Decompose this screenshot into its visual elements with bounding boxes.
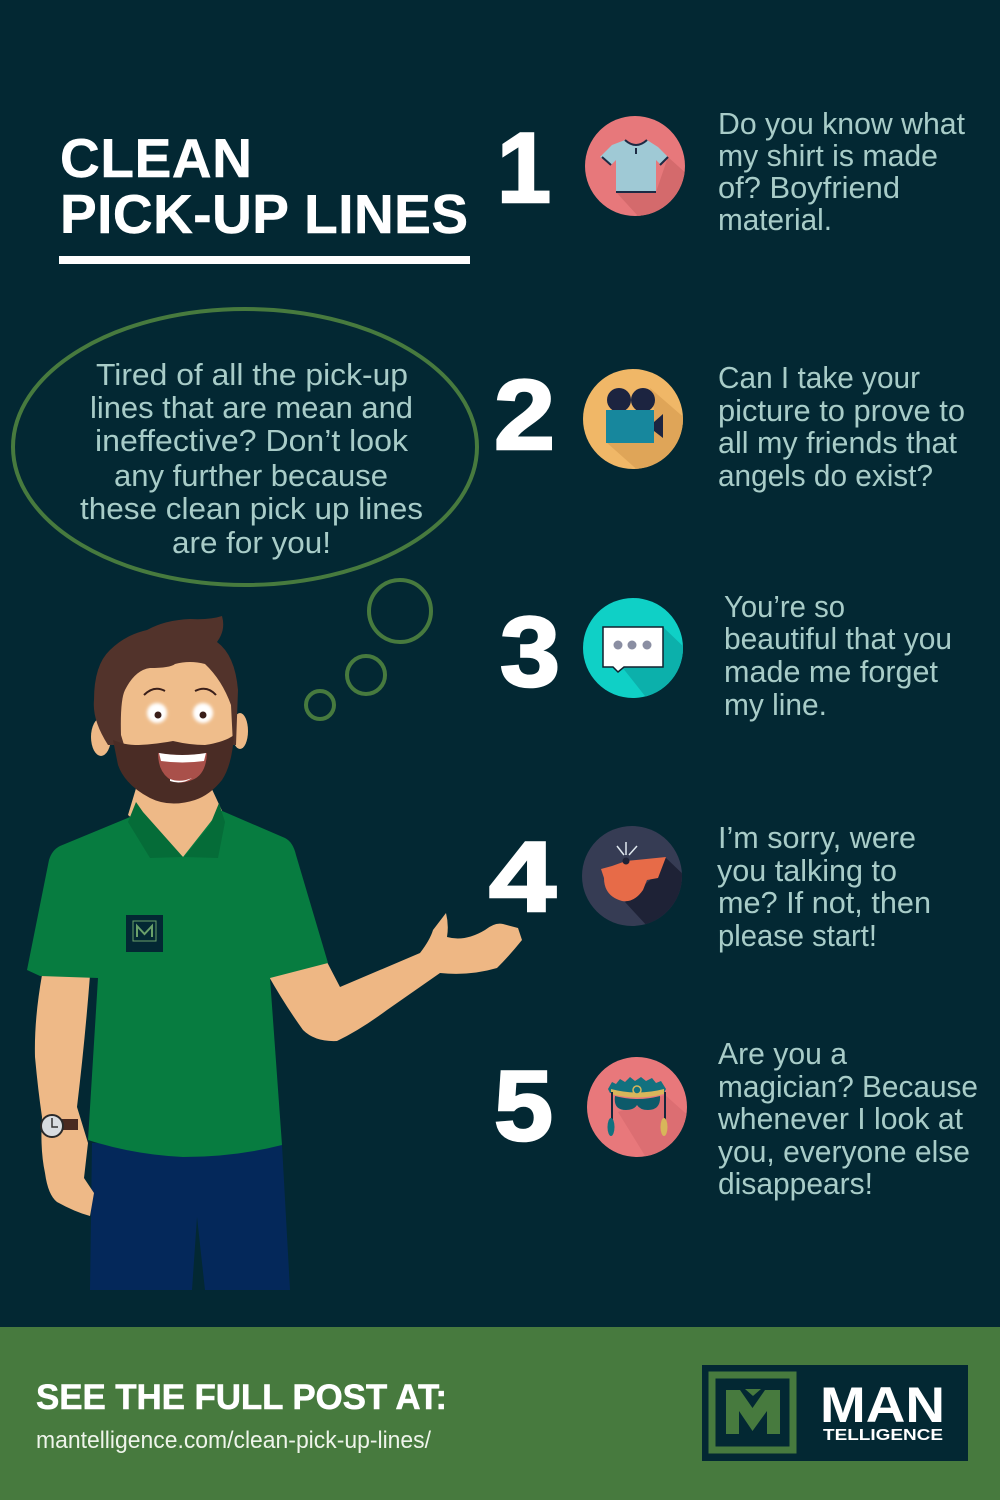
man: trousers [90,1143,290,1290]
title [59,127,470,264]
man: shirt logo badge [126,915,163,952]
icon: speech bubble [583,598,683,698]
icon: whistle [582,826,682,926]
text: line 3: You’re so [724,589,845,624]
text: line 3: made me forget [724,654,938,689]
man: neck [128,785,224,860]
logo: Mantelligence: MAN [820,1377,945,1433]
footer band [0,1327,1000,1500]
text: line 3: beautiful that you [724,621,952,656]
man: hair [94,616,238,745]
thought bubble with intro text: ineffective? Don’t look [95,423,409,458]
thought bubble with intro text: Tired of all the pick-up [96,357,408,392]
number 5: 5 [494,1050,553,1161]
thought bubble with intro text: these clean pick up lines [80,491,423,526]
man: ears [91,713,248,756]
text: line 2 [718,360,965,493]
text: line 4: you talking to [717,853,897,888]
title: PICK-UP LINES [60,183,468,245]
man: eyes [144,689,216,723]
text: line 5: you, everyone else [718,1134,970,1169]
text: line 1: of? Boyfriend [718,170,900,205]
title: CLEAN [60,127,252,189]
icon: shirt [585,116,685,216]
thought bubble with intro text: are for you! [172,525,331,560]
text: line 2: angels do exist? [718,458,933,493]
text: line 5 [717,1036,978,1201]
man: open mouth [158,753,207,783]
illustration: smiling bearded man in green polo [27,616,522,1290]
text: line 1: material. [718,202,832,237]
logo: Mantelligence [702,1365,968,1461]
text: line 4 [717,820,931,953]
text: line 3 [724,589,952,722]
man: face [121,662,233,748]
footer call to action: SEE THE FULL POST AT: [36,1378,447,1417]
text: line 5: disappears! [718,1166,873,1201]
text: line 1: Do you know what [718,106,965,141]
text: line 2: all my friends that [718,425,957,460]
text: line 5: whenever I look at [717,1101,963,1136]
thought bubble with intro text: any further because [114,458,388,493]
man: polo shirt [27,810,328,1157]
icon: video camera [583,369,683,469]
text: line 5: Are you a [718,1036,848,1071]
text: line 2: picture to prove to [718,393,965,428]
thought bubble with intro text: lines that are mean and [90,390,413,425]
text: line 2: Can I take your [718,360,920,395]
number 3: 3 [500,596,560,707]
icon: masquerade mask [587,1057,687,1157]
man: left arm and hand [35,975,94,1216]
man: collar [128,802,225,858]
text: line 4: I’m sorry, were [718,820,916,855]
number 2: 2 [494,359,555,470]
footer url: mantelligence.com/clean-pick-up-lines/ [36,1427,431,1454]
text: line 4: me? If not, then [718,885,931,920]
thought bubble with intro text [13,309,477,719]
man: beard [113,735,234,804]
number 4: 4 [489,821,556,932]
text: line 1 [718,106,965,237]
number 1: 1 [497,112,551,223]
text: line 3: my line. [724,687,827,722]
logo: Mantelligence: TELLIGENCE [823,1427,943,1444]
text: line 1: my shirt is made [718,138,938,173]
text: line 5: magician? Because [718,1069,978,1104]
text: line 4: please start! [718,918,877,953]
man: wristwatch [41,1115,78,1137]
man: pointing arm and open hand [268,913,522,1041]
